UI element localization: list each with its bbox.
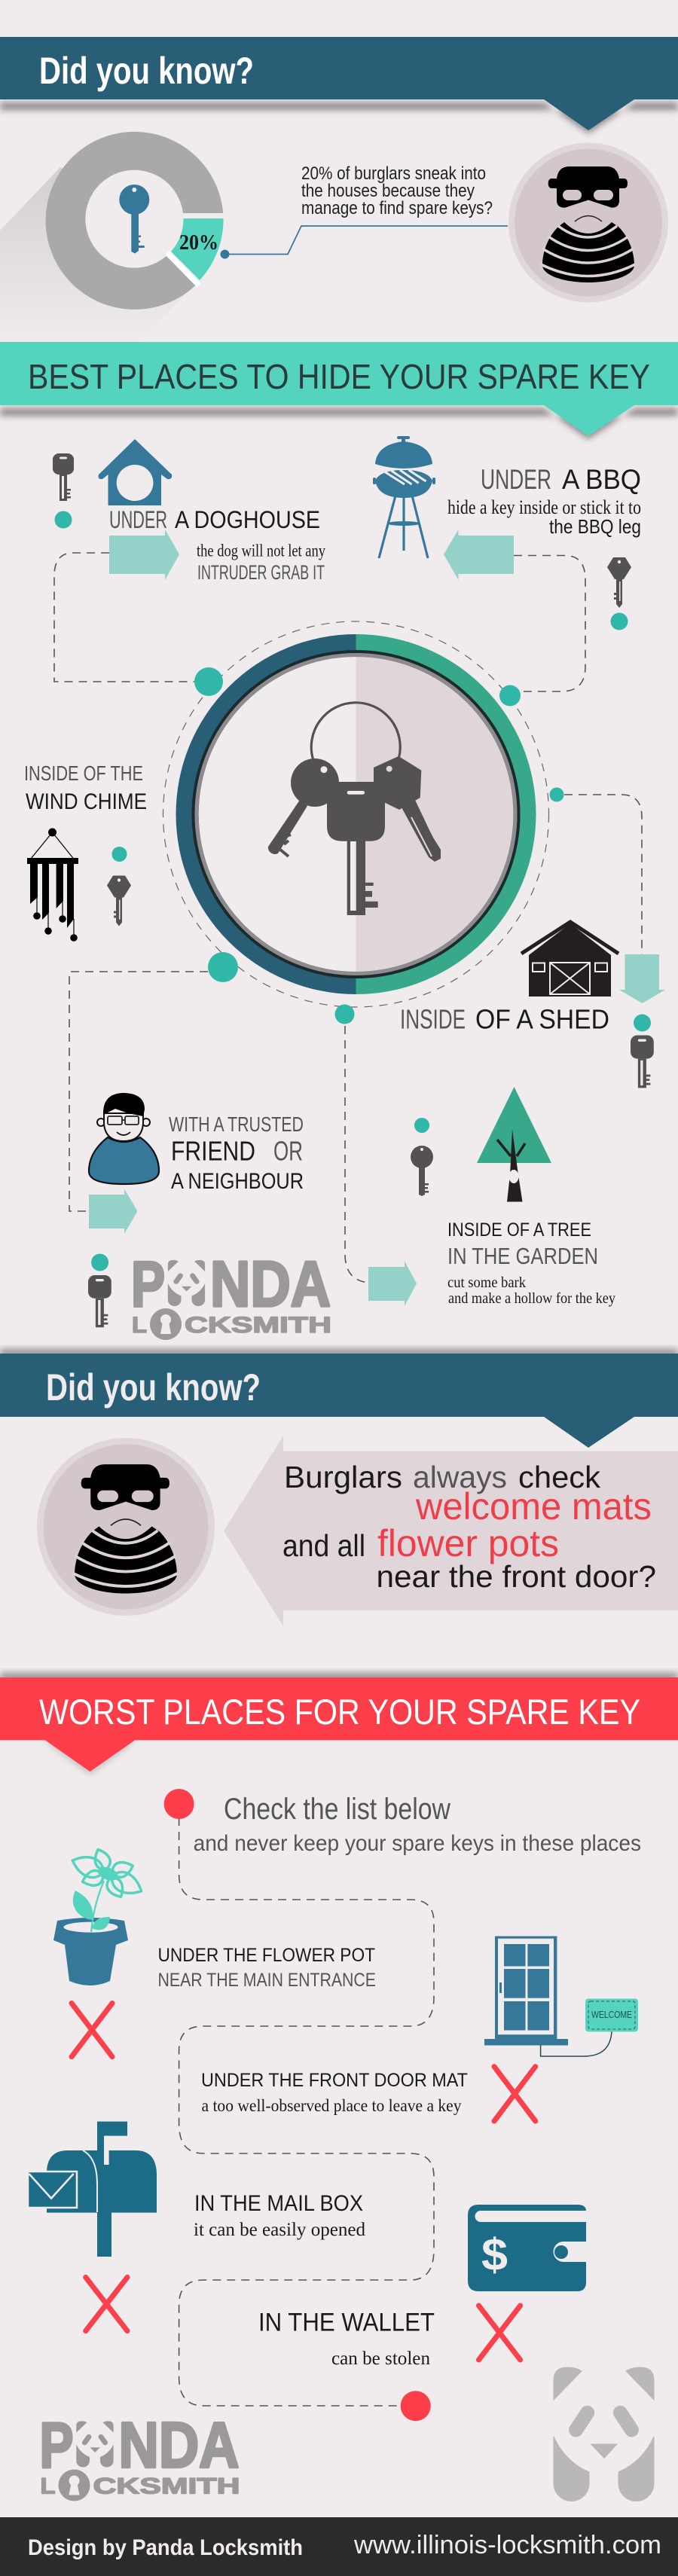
icon: red cross (479, 2306, 521, 2360)
heading (258, 2309, 435, 2369)
logo wordmark: NDA (210, 1249, 331, 1320)
dashed route (179, 1818, 434, 2406)
heading: IN THE GARDEN (447, 1243, 598, 1269)
item: in the wallet (258, 2205, 586, 2369)
header: did you know (middle) (0, 1349, 678, 1448)
icon: red cross (86, 2277, 127, 2331)
icon: wallet (468, 2205, 586, 2291)
heading: IN THE MAIL BOX (194, 2191, 363, 2216)
icon: wind chime (27, 829, 78, 942)
icon: barbecue grill (373, 436, 435, 558)
logo: panda locksmith: CKSMITH (93, 2474, 240, 2499)
text: burglars always check: Burglars (284, 1460, 402, 1494)
description: cut some bark (447, 1274, 526, 1291)
header: did you know (middle): Did you know? (46, 1366, 261, 1409)
heading: A DOGHOUSE (175, 506, 320, 533)
heading: INSIDE OF THE (24, 762, 143, 785)
text: red highlights: flower pots (377, 1522, 559, 1564)
heading (158, 1945, 376, 1991)
logo: panda locksmith: NDA (119, 2410, 240, 2481)
icon: red cross (72, 2004, 112, 2057)
text: burglars always check: check (518, 1460, 601, 1494)
icon: tree (477, 1087, 551, 1202)
arrow (444, 530, 514, 580)
heading (481, 464, 641, 495)
item: inside of a shed (400, 922, 665, 1088)
icon: flower pot (53, 1847, 145, 1985)
heading (24, 762, 147, 814)
logo wordmark: L (132, 1313, 147, 1338)
heading: IN THE WALLET (258, 2309, 435, 2337)
text: red highlights (377, 1485, 652, 1564)
text: check the list (194, 1793, 641, 1856)
description: INTRUDER GRAB IT (197, 561, 325, 584)
icon: shed (521, 922, 618, 997)
icon: car key (88, 1275, 111, 1327)
callout line (220, 226, 508, 259)
description (197, 541, 325, 584)
item: under a bbq (373, 436, 641, 630)
heading: a too well-observed place to leave a key (202, 2096, 462, 2115)
text: red highlights: welcome mats (415, 1485, 652, 1528)
logo: panda locksmith: P (39, 2410, 74, 2481)
item: under the flower pot (53, 1847, 376, 2057)
heading: it can be easily opened (194, 2220, 365, 2240)
header: worst places (0, 1673, 678, 1775)
icon: round key (411, 1146, 433, 1196)
logo: panda locksmith (39, 2410, 240, 2501)
icon: burglar medallion (37, 1438, 215, 1616)
text: burglars always check (282, 1460, 656, 1594)
icon: doghouse (99, 439, 172, 505)
footer (0, 2517, 678, 2576)
text: burglars statistic: manage to find spare keys? (301, 198, 493, 218)
icon: bunch of three keys (268, 703, 441, 915)
icon: car key (631, 1035, 654, 1088)
text: burglars statistic (301, 163, 493, 218)
text: check the list: Check the list below (224, 1793, 450, 1826)
heading: UNDER (109, 506, 167, 533)
footer: www.illinois-locksmith.com (353, 2531, 661, 2559)
description: and make a hollow for the key (448, 1290, 615, 1307)
heading (400, 1003, 609, 1035)
header: best places (0, 342, 678, 439)
text: trusted friend or a neighbour (169, 1113, 304, 1194)
heading: can be stolen (331, 2349, 430, 2369)
heading: INSIDE OF A TREE (447, 1219, 591, 1241)
description: the BBQ leg (549, 515, 641, 538)
description (447, 1274, 615, 1307)
text: check the list: and never keep your spare keys in these places (194, 1831, 641, 1856)
header: did you know (top) (0, 37, 678, 133)
icon: door and welcome mat: WELCOME (591, 2009, 632, 2020)
logo wordmark: CKSMITH (185, 1313, 331, 1338)
heading: WIND CHIME (26, 789, 147, 814)
text: burglars always check: near the front door? (377, 1559, 656, 1594)
heading: OF A SHED (475, 1003, 609, 1035)
route end dots (164, 1789, 431, 2421)
logo wordmark: P (131, 1249, 165, 1320)
icon: red cross (494, 2067, 536, 2121)
icon: hex key (607, 557, 631, 608)
connector dots (194, 667, 563, 1024)
heading (201, 2070, 468, 2115)
description: the dog will not let any (197, 541, 325, 560)
logo: panda locksmith with key (88, 1249, 331, 1340)
callout arrow: burglars check (224, 1436, 678, 1626)
logo: panda locksmith: L (41, 2474, 56, 2499)
item: under a doghouse (53, 439, 325, 584)
heading: NEAR THE MAIN ENTRANCE (158, 1970, 376, 1991)
heading: UNDER THE FRONT DOOR MAT (201, 2070, 468, 2091)
dashed connectors (54, 553, 642, 1283)
heading: INSIDE (400, 1003, 466, 1035)
text: burglars statistic: 20% of burglars sneak into (301, 163, 486, 184)
icon: hex key (107, 875, 131, 926)
text: burglars always check: and all (282, 1528, 365, 1563)
header: did you know (top): Did you know? (39, 50, 254, 92)
icon: mailbox (28, 2122, 157, 2257)
arrow (89, 1189, 137, 1234)
description (447, 496, 641, 538)
donut chart: 20 percent (0, 132, 224, 341)
text: burglars statistic: the houses because they (301, 181, 475, 201)
item: in the mail box (28, 2122, 365, 2331)
icon: person (89, 1093, 159, 1184)
arrow (109, 530, 179, 580)
heading: UNDER (481, 464, 551, 495)
text: trusted friend or a neighbour: WITH A TRUSTED (169, 1113, 304, 1136)
text: trusted friend or a neighbour: A NEIGHBOUR (171, 1169, 304, 1194)
icon: key in donut (119, 185, 149, 253)
heading: A BBQ (562, 464, 641, 495)
icon: wallet: $ (481, 2230, 508, 2280)
arrow (368, 1261, 417, 1306)
heading: UNDER THE FLOWER POT (158, 1945, 375, 1966)
item: with a trusted friend (89, 1093, 304, 1234)
item: inside of a tree (368, 1087, 615, 1307)
heading (109, 506, 320, 533)
icon: door and welcome mat (484, 1936, 638, 2056)
footer: Design by Panda Locksmith (28, 2535, 303, 2560)
description: hide a key inside or stick it to (447, 496, 641, 518)
icon: burglar medallion (508, 143, 668, 303)
icon: panda face (554, 2367, 654, 2501)
item: under the front door mat (201, 1936, 638, 2121)
arrow (619, 954, 665, 1003)
icon: car key (53, 453, 74, 501)
heading (447, 1219, 598, 1269)
donut chart: 20 percent: 20% (179, 230, 218, 255)
heading (194, 2191, 365, 2240)
text: trusted friend or a neighbour: OR (273, 1136, 303, 1166)
text: burglars always check: always (413, 1460, 507, 1494)
item: inside of the wind chime (24, 762, 147, 942)
icon: central key ring medallion (176, 634, 536, 994)
text: trusted friend or a neighbour: FRIEND (171, 1136, 255, 1166)
logo wordmark (131, 1249, 331, 1340)
